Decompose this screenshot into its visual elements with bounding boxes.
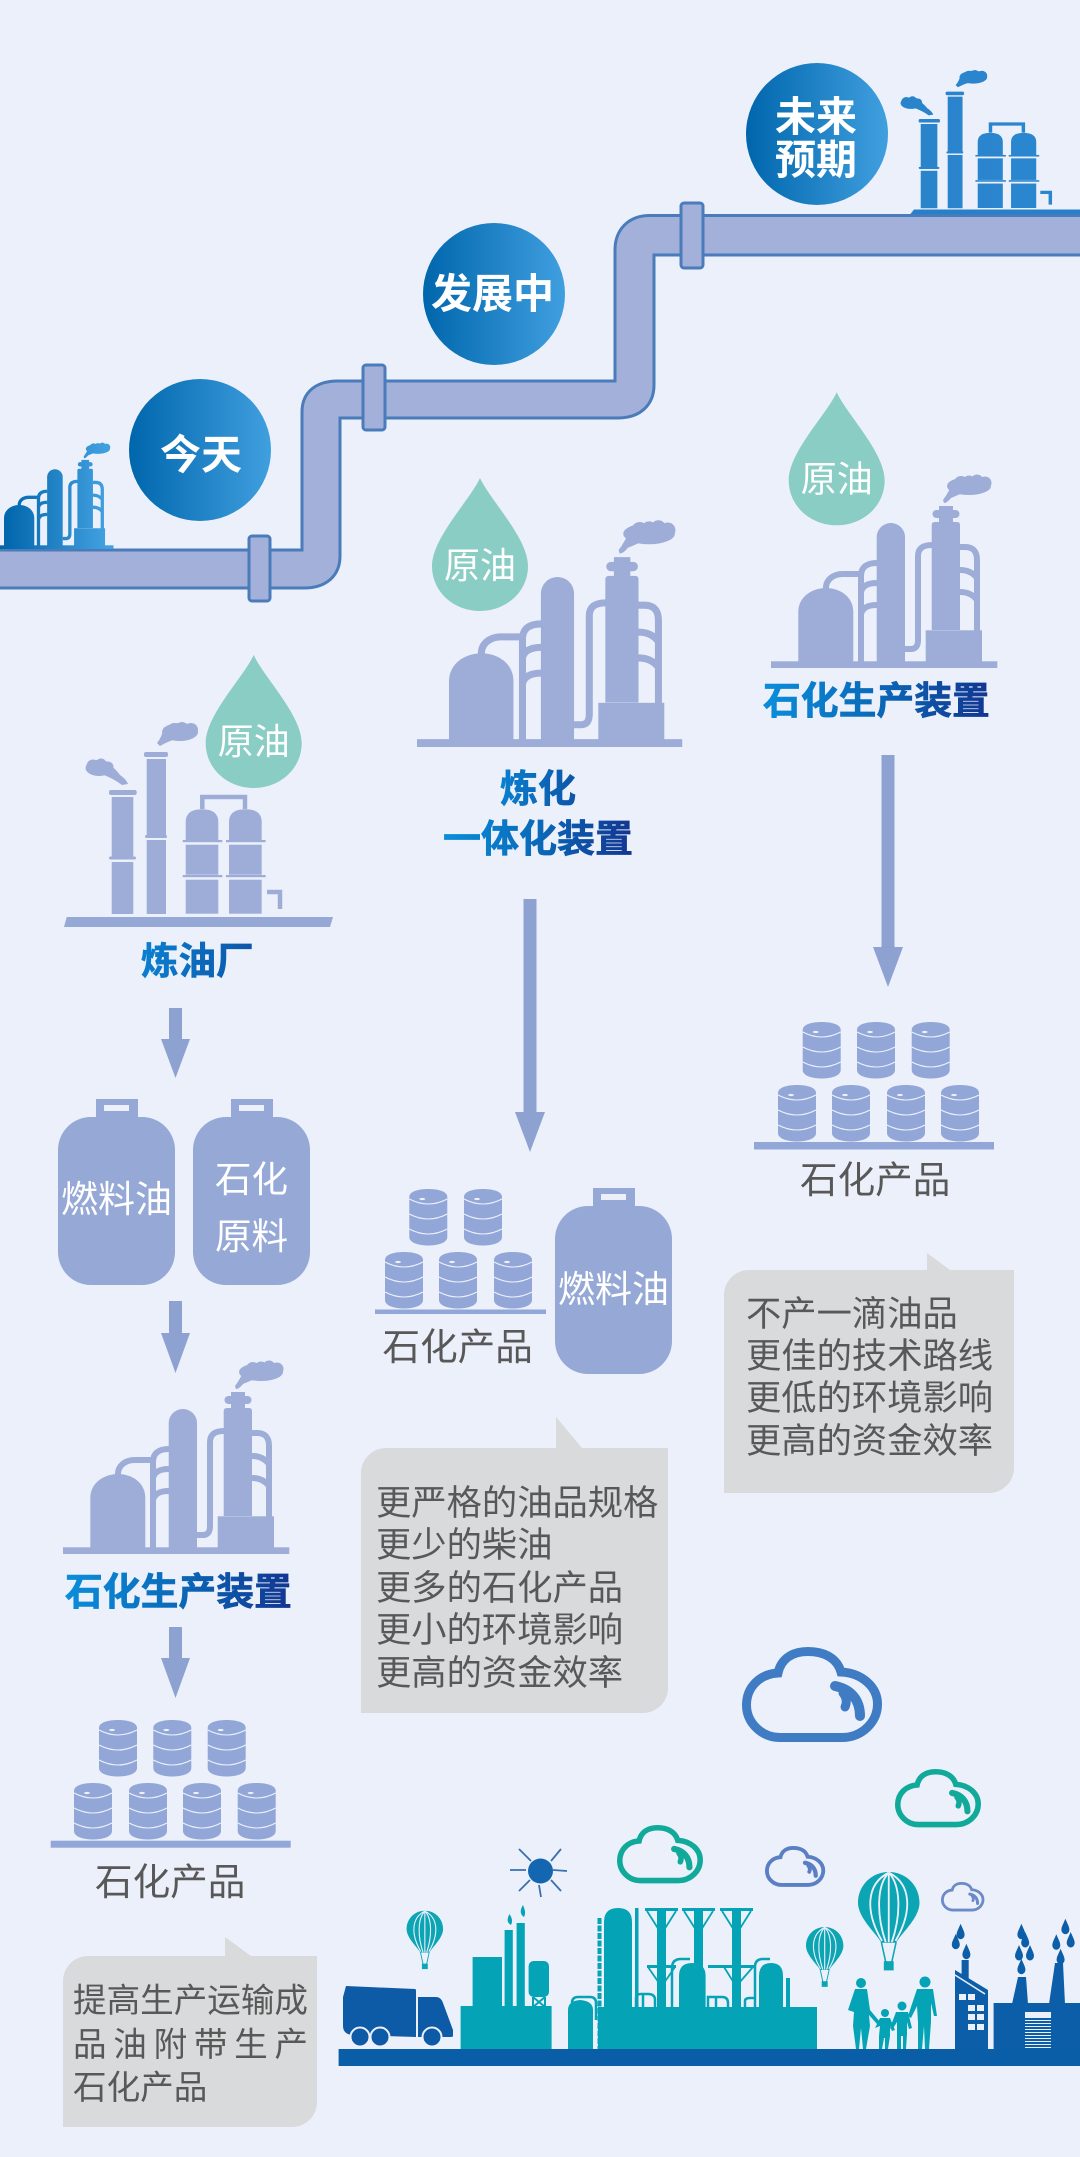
icon: crude oil drop <box>206 655 302 788</box>
arrow <box>515 899 545 1152</box>
callout: 不产一滴油品 <box>746 1295 958 1334</box>
icon: small plant today <box>0 443 113 549</box>
callout <box>63 1937 317 2127</box>
callout: 更小的环境影响 <box>376 1611 623 1650</box>
arrow <box>161 1301 190 1373</box>
icon: refinery <box>64 722 333 927</box>
tank: 燃料油: 燃料油 <box>61 1179 172 1220</box>
callout: 品油附带生产 <box>73 2026 308 2064</box>
stage badge: 未来预期 <box>746 63 888 205</box>
pipeline <box>0 203 1080 601</box>
callout: 更高的资金效率 <box>746 1422 993 1461</box>
heading: 炼化一体化装置: 炼化 <box>500 769 576 811</box>
callout: 更少的柴油 <box>376 1526 552 1565</box>
icon: petrochemical plant <box>771 474 997 668</box>
stage badge: 未来预期: 未来 <box>775 94 857 140</box>
label: 石化产品: 石化产品 <box>800 1159 950 1201</box>
heading: 石化生产装置: 石化生产装置 <box>65 1572 292 1614</box>
scene: green industry skyline <box>339 1828 1080 2066</box>
arrow <box>161 1008 190 1078</box>
stage badge: 未来预期: 预期 <box>775 137 857 183</box>
icon: sun <box>510 1849 567 1897</box>
callout: 更严格的油品规格 <box>376 1484 658 1523</box>
icon: crude oil drop <box>432 478 528 611</box>
icon: large blue cloud <box>746 1652 878 1738</box>
callout: 更高的资金效率 <box>376 1654 623 1693</box>
icon: petrochemical plant <box>63 1360 289 1554</box>
icon: crude oil drop: 原油 <box>218 721 290 762</box>
ground <box>339 2049 1080 2066</box>
tank: 燃料油: 燃料油 <box>558 1269 669 1310</box>
icon: balloon middle <box>806 1927 843 1987</box>
callout <box>361 1417 668 1713</box>
icon: crude oil drop: 原油 <box>444 545 516 586</box>
icon: balloon large <box>858 1872 920 1970</box>
icon: barrels <box>51 1720 291 1848</box>
arrow <box>161 1627 190 1698</box>
icon: balloon left <box>407 1911 443 1969</box>
heading: 石化生产装置: 石化生产装置 <box>763 681 990 723</box>
column: integrated complex <box>361 478 682 1713</box>
callout: 提高生产运输成 <box>73 1982 308 2020</box>
icon: small teal cloud <box>898 1772 978 1825</box>
icon: teal cloud <box>620 1828 700 1881</box>
heading: 炼化一体化装置: 一体化装置 <box>443 819 633 861</box>
icon: crude oil drop: 原油 <box>801 458 873 499</box>
icon: blue cloud <box>767 1848 823 1885</box>
tank: 石化原料: 原料 <box>215 1216 288 1257</box>
label: 石化产品: 石化产品 <box>95 1861 245 1903</box>
icon: teal factory <box>461 1905 552 2049</box>
icon: small refinery future <box>901 70 1080 214</box>
icon: refinery silhouette <box>568 1908 817 2049</box>
icon: crude oil drop <box>789 392 885 525</box>
callout: 更低的环境影响 <box>746 1379 993 1418</box>
tank: 燃料油 <box>555 1188 672 1374</box>
callout: 更多的石化产品 <box>376 1569 623 1608</box>
stage badge: 发展中: 发展中 <box>431 271 554 317</box>
stage badge: 今天: 今天 <box>160 432 242 478</box>
tank: 燃料油 <box>58 1099 175 1285</box>
callout: 石化产品 <box>73 2069 207 2107</box>
stage badge: 今天 <box>129 379 271 521</box>
callout <box>724 1253 1014 1493</box>
icon: blue factories <box>952 1919 1080 2049</box>
icon: family <box>848 1976 937 2049</box>
tank: 石化原料 <box>193 1099 310 1285</box>
icon: barrels <box>375 1189 546 1314</box>
heading: 炼化一体化装置 <box>443 769 633 861</box>
label: 石化产品: 石化产品 <box>382 1326 533 1368</box>
stage badge: 发展中 <box>423 223 565 365</box>
icon: integrated plant <box>417 520 682 747</box>
icon: truck <box>343 1986 453 2046</box>
heading: 炼油厂: 炼油厂 <box>141 940 254 982</box>
callout: 更佳的技术路线 <box>746 1337 993 1376</box>
tank: 石化原料: 石化 <box>215 1159 288 1200</box>
column: refinery today <box>51 655 333 2127</box>
arrow <box>873 755 903 987</box>
column: future petrochemical <box>724 392 1014 1493</box>
icon: small blue cloud <box>942 1883 983 1910</box>
icon: barrels <box>754 1022 994 1150</box>
